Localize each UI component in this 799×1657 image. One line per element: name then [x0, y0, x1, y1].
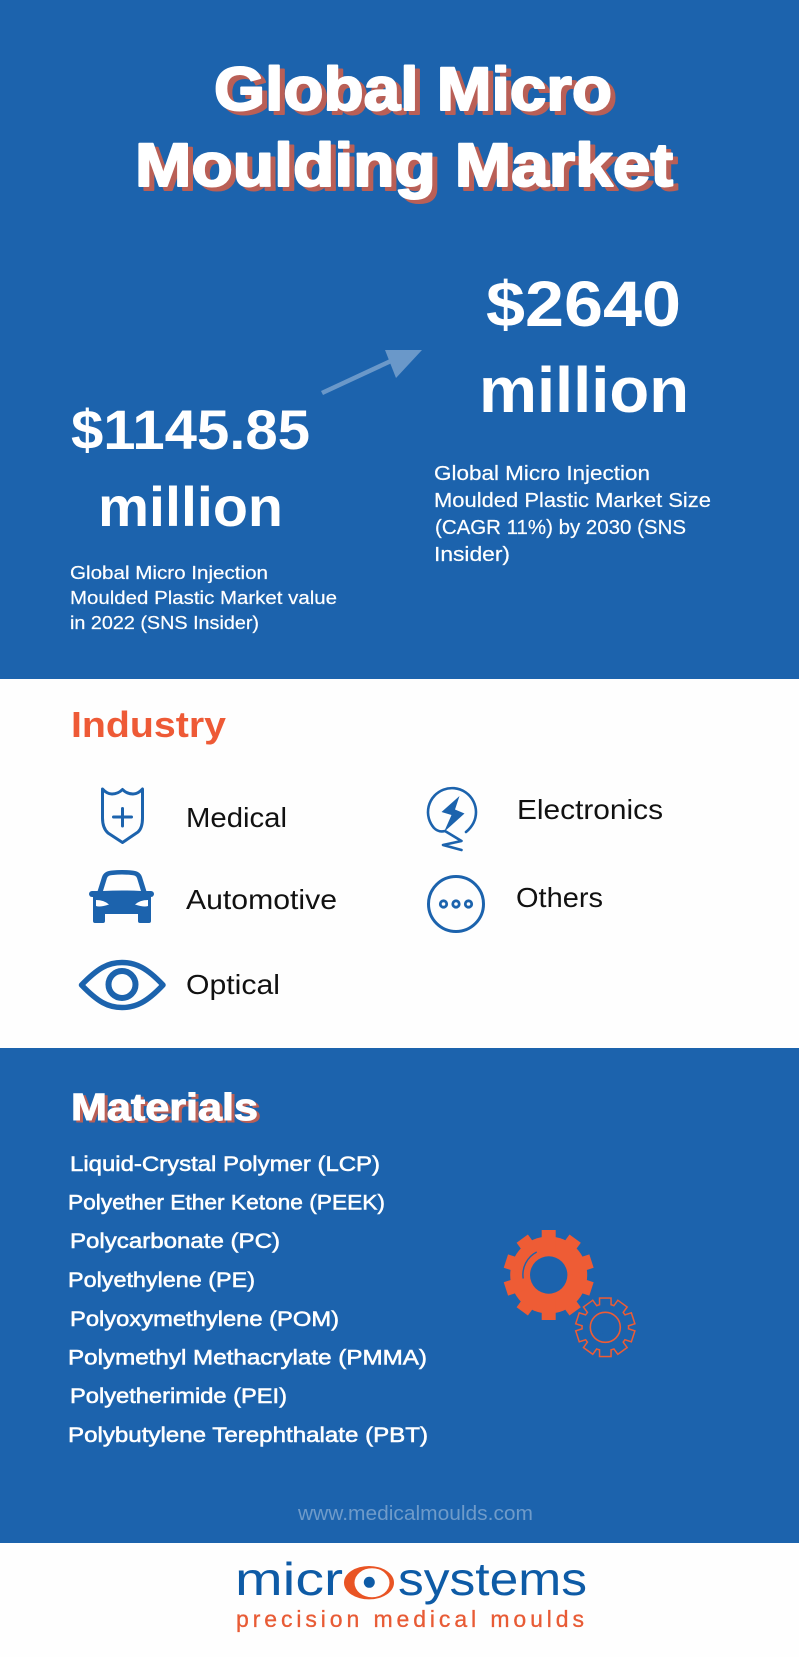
icon: electronics bolt: [428, 788, 476, 850]
title: Moulding Market: [135, 131, 673, 199]
label: others: Others: [516, 882, 603, 913]
text: 2022 market description: Global Micro Injection: [70, 562, 268, 583]
icon: logo eye: [344, 1566, 394, 1599]
logo: microsystems: [235, 1553, 587, 1632]
label: medical: Medical: [186, 802, 287, 833]
text: 2030 market description: [434, 462, 711, 566]
text: 2022 market description: Moulded Plastic Market value: [70, 587, 337, 608]
text: website: www.medicalmoulds.com: [297, 1503, 533, 1525]
text: 2030 market description: (CAGR 11%) by 2030 (SNS: [435, 516, 686, 539]
stat: 2030 market size: million: [479, 354, 689, 426]
stat: 2022 market value: [71, 398, 310, 538]
icon: automotive car: [89, 870, 154, 923]
stat: 2030 market size: [479, 268, 689, 426]
text: 2030 market description: Moulded Plastic Market Size: [434, 489, 711, 512]
stat: 2022 market value: $1145.85: [71, 398, 310, 461]
list: materials: [68, 1152, 428, 1447]
list: materials: Liquid-Crystal Polymer (LCP): [70, 1152, 380, 1176]
panel: market overview: [0, 0, 799, 679]
label: optical: Optical: [186, 969, 280, 1000]
label: electronics: Electronics: [517, 794, 663, 825]
logo: microsystems: systems: [398, 1553, 587, 1605]
text: 2022 market description: [70, 562, 337, 633]
panel: industry: [0, 679, 799, 1048]
list: materials: Polycarbonate (PC): [70, 1229, 280, 1253]
stat: 2030 market size: $2640: [486, 268, 681, 340]
list: materials: Polyoxymethylene (POM): [70, 1307, 339, 1331]
list: materials: Polyetherimide (PEI): [70, 1384, 287, 1408]
logo: microsystems: micr: [235, 1553, 343, 1605]
text: 2022 market description: in 2022 (SNS Insider): [70, 612, 259, 633]
list: materials: Polymethyl Methacrylate (PMMA): [68, 1346, 427, 1370]
icon: others: [428, 876, 484, 932]
heading: industry: Industry: [71, 704, 226, 745]
list: materials: Polyether Ether Ketone (PEEK): [68, 1190, 385, 1214]
heading: materials: Materials: [71, 1087, 258, 1129]
icon: medical shield: [102, 789, 142, 842]
panel: materials: [0, 1048, 799, 1543]
logo: microsystems: precision medical moulds: [236, 1606, 584, 1632]
text: 2030 market description: Insider): [434, 543, 510, 566]
stat: 2022 market value: million: [98, 475, 283, 538]
title: Global Micro: [214, 55, 612, 123]
panel: footer logo: [0, 1543, 799, 1657]
arrow: growth: [321, 350, 422, 395]
text: 2030 market description: Global Micro Injection: [434, 462, 650, 485]
list: materials: Polyethylene (PE): [68, 1268, 255, 1292]
label: automotive: Automotive: [186, 884, 337, 915]
title: [135, 55, 673, 199]
icon: gears: [504, 1230, 634, 1356]
list: materials: Polybutylene Terephthalate (PBT): [68, 1423, 428, 1447]
icon: optical eye: [82, 962, 163, 1008]
